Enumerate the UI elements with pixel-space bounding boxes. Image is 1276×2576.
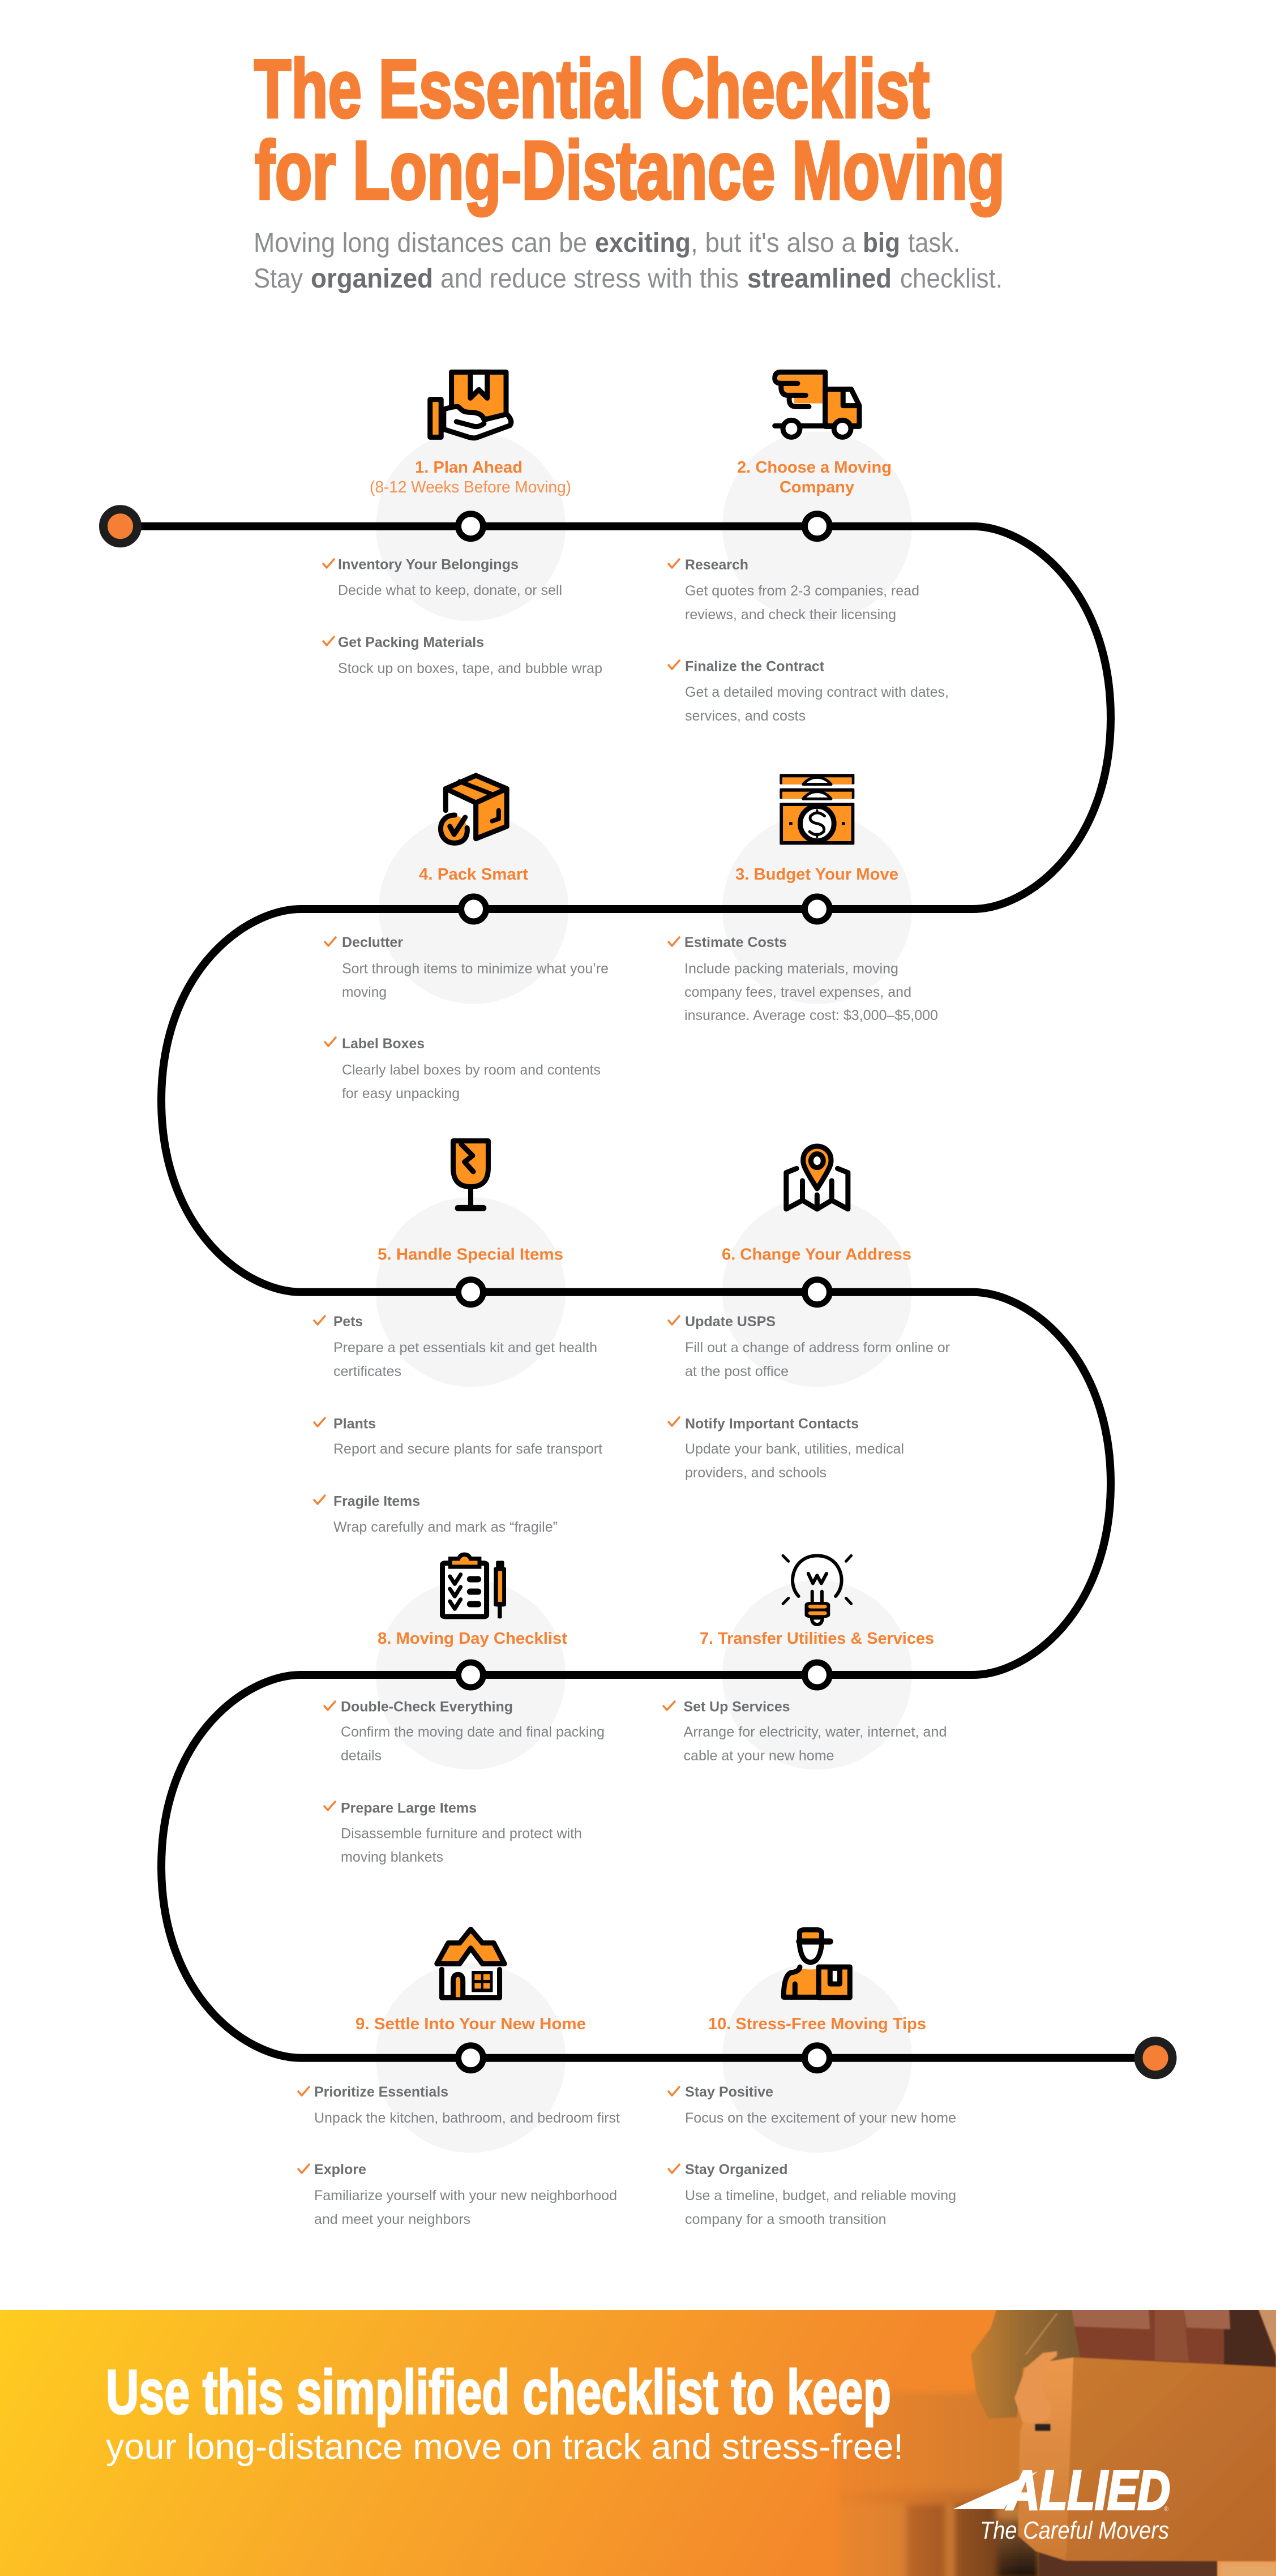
checklist item: double-check: Double-Check Everything xyxy=(341,1699,513,1715)
icon: moving truck xyxy=(775,372,859,437)
title: The Essential Checklist xyxy=(254,42,930,135)
heading xyxy=(370,458,571,496)
title: for Long-Distance Moving xyxy=(255,124,1005,216)
checklist item: large items: moving blankets xyxy=(341,1849,443,1865)
panel: step 10 stress-free moving tips xyxy=(669,1930,956,2227)
heading: 6. Change Your Address xyxy=(722,1246,911,1264)
checklist item: notify contacts: Update your bank, utilities, medical xyxy=(685,1441,904,1457)
checklist item: finalize contract: Finalize the Contract xyxy=(685,659,825,675)
intro text: streamlined xyxy=(747,264,892,294)
checklist item: set up services: Set Up Services xyxy=(684,1699,790,1715)
panel: step 1 plan ahead xyxy=(323,372,602,676)
checklist item: research xyxy=(669,557,919,623)
panel: step 4 pack smart xyxy=(325,775,609,1101)
checklist item: packing materials: Get Packing Materials xyxy=(338,635,484,650)
checklist item: label boxes: Clearly label boxes by room and contents xyxy=(342,1062,601,1078)
checklist item: fragile items xyxy=(314,1493,558,1535)
checklist item: packing materials: Stock up on boxes, tape, and bubble wrap xyxy=(338,661,602,676)
checklist item: estimate costs: company fees, travel expenses, and xyxy=(684,984,911,1000)
checklist item: double-check xyxy=(324,1699,605,1764)
icon: mover with box xyxy=(783,1930,850,1998)
checklist item: explore: and meet your neighbors xyxy=(314,2211,470,2227)
heading: Company xyxy=(780,478,854,496)
checklist item: label boxes xyxy=(325,1036,601,1101)
checklist item: estimate costs: insurance. Average cost: $3,000–$5,000 xyxy=(684,1008,938,1023)
checklist item: double-check: details xyxy=(341,1748,382,1764)
checklist item: research: reviews, and check their licensing xyxy=(685,607,896,623)
checklist item: set up services: Arrange for electricity, water, internet, and xyxy=(684,1724,947,1740)
logo: Allied: ® xyxy=(1164,2506,1168,2513)
heading xyxy=(737,458,892,496)
checklist item: declutter xyxy=(325,935,609,1000)
intro text: exciting xyxy=(595,228,691,258)
heading: 2. Choose a Moving xyxy=(737,458,892,477)
panel: step 8 moving day checklist xyxy=(324,1553,605,1865)
checklist item: pets: Pets xyxy=(333,1314,363,1330)
checklist item: label boxes: Label Boxes xyxy=(342,1036,425,1052)
title xyxy=(254,42,1005,216)
panel: step 5 handle special items xyxy=(314,1141,602,1535)
logo: Allied: ALLIED xyxy=(1006,2459,1170,2521)
heading: 1. Plan Ahead xyxy=(415,458,523,477)
icon: box in hand xyxy=(430,372,511,438)
panel: step 9 settle into your new home xyxy=(298,1929,620,2227)
end marker xyxy=(1138,2041,1172,2075)
heading: 3. Budget Your Move xyxy=(735,865,898,884)
heading: 7. Transfer Utilities & Services xyxy=(700,1630,934,1648)
timeline track xyxy=(103,509,1172,2075)
intro text: task. xyxy=(908,228,960,258)
intro text: organized xyxy=(311,264,433,294)
logo: Allied xyxy=(953,2470,1170,2539)
checklist item: stay organized: Use a timeline, budget, and reliable moving xyxy=(685,2188,956,2204)
checklist item: finalize contract: Get a detailed moving contract with dates, xyxy=(685,684,949,700)
checklist item: set up services: cable at your new home xyxy=(684,1748,834,1764)
icon: map pin xyxy=(786,1146,848,1209)
checklist item: pets xyxy=(314,1314,597,1379)
checklist item: pets: Prepare a pet essentials kit and get health xyxy=(333,1340,597,1356)
heading: 9. Settle Into Your New Home xyxy=(356,2015,586,2033)
checklist item: large items: Prepare Large Items xyxy=(341,1801,477,1816)
checklist item: packing materials xyxy=(323,635,602,676)
panel: step 3 budget your move xyxy=(669,774,938,1023)
checklist item: stay organized xyxy=(669,2162,956,2227)
checklist item: explore: Familiarize yourself with your new neighborhood xyxy=(314,2188,617,2204)
checklist item: inventory: Decide what to keep, donate, or sell xyxy=(338,582,562,598)
intro text: Stay xyxy=(254,264,303,294)
checklist item: update usps xyxy=(669,1314,950,1379)
checklist item: declutter: Declutter xyxy=(342,935,403,950)
checklist item: research: Get quotes from 2-3 companies, read xyxy=(685,583,919,599)
heading: 8. Moving Day Checklist xyxy=(378,1630,567,1648)
intro text: big xyxy=(863,228,900,258)
checklist item: notify contacts: Notify Important Contacts xyxy=(685,1416,859,1432)
checklist item: stay organized: Stay Organized xyxy=(685,2162,788,2178)
checklist item: fragile items: Wrap carefully and mark as “fragile” xyxy=(333,1519,558,1535)
heading: 5. Handle Special Items xyxy=(378,1246,563,1264)
checklist item: finalize contract xyxy=(669,659,949,724)
icon: house xyxy=(437,1929,504,1998)
intro text: Moving long distances can be xyxy=(254,228,587,258)
checklist item: update usps: Update USPS xyxy=(685,1314,776,1330)
checklist item: prioritize essentials: Unpack the kitchen, bathroom, and bedroom first xyxy=(314,2110,620,2126)
checklist item: notify contacts: providers, and schools xyxy=(685,1465,827,1481)
banner subline: your long-distance move on track and stress-free! xyxy=(106,2427,904,2467)
icon: money stack xyxy=(780,774,854,845)
panel: step 7 transfer utilities xyxy=(663,1555,947,1764)
checklist item: update usps: Fill out a change of address form online or xyxy=(685,1340,950,1356)
checklist item: pets: certificates xyxy=(333,1364,401,1379)
icon: clipboard and pen xyxy=(443,1553,506,1618)
checklist item: declutter: Sort through items to minimize what you’re xyxy=(342,961,609,977)
checklist item: prioritize essentials xyxy=(298,2084,620,2126)
panel: footer banner xyxy=(0,2307,1276,2576)
icon: fragile glass xyxy=(453,1141,488,1208)
checklist item: prioritize essentials: Prioritize Essentials xyxy=(314,2084,448,2100)
checklist item: estimate costs xyxy=(669,935,938,1023)
checklist item: inventory: Inventory Your Belongings xyxy=(338,557,519,573)
checklist item: label boxes: for easy unpacking xyxy=(342,1086,460,1101)
checklist item: inventory xyxy=(323,557,562,598)
intro text: and reduce stress with this xyxy=(440,264,739,294)
checklist item: stay positive xyxy=(669,2084,956,2126)
intro text xyxy=(254,228,1003,294)
icon: box with check xyxy=(440,775,507,843)
checklist item: explore: Explore xyxy=(314,2162,366,2178)
checklist item: plants xyxy=(314,1416,602,1457)
checklist item: explore xyxy=(298,2162,617,2227)
checklist item: large items: Disassemble furniture and protect with xyxy=(341,1826,582,1842)
checklist item: finalize contract: services, and costs xyxy=(685,708,806,724)
heading: 4. Pack Smart xyxy=(419,865,528,884)
checklist item: plants: Report and secure plants for safe transport xyxy=(333,1441,602,1457)
heading: (8-12 Weeks Before Moving) xyxy=(370,478,571,496)
heading: 10. Stress-Free Moving Tips xyxy=(708,2015,926,2033)
checklist item: declutter: moving xyxy=(342,984,387,1000)
checklist item: plants: Plants xyxy=(333,1416,376,1432)
checklist item: set up services xyxy=(663,1699,947,1764)
intro text: , but it's also a xyxy=(691,228,856,258)
photo: mover carrying a box xyxy=(838,2307,1276,2576)
checklist item: estimate costs: Estimate Costs xyxy=(684,935,787,950)
start marker xyxy=(103,509,137,543)
checklist item: notify contacts xyxy=(669,1416,904,1481)
intro text: checklist. xyxy=(900,264,1003,294)
panel: step 2 choose a moving company xyxy=(669,372,949,724)
checklist item: double-check: Confirm the moving date and final packing xyxy=(341,1724,605,1740)
panel: step 6 change your address xyxy=(669,1146,950,1481)
checklist item: research: Research xyxy=(685,557,748,573)
logo: Allied: The Careful Movers xyxy=(980,2517,1169,2544)
checklist item: stay organized: company for a smooth transition xyxy=(685,2211,887,2227)
icon: light bulb xyxy=(783,1555,851,1625)
checklist item: large items xyxy=(324,1801,582,1865)
checklist item: fragile items: Fragile Items xyxy=(333,1493,420,1509)
checklist item: stay positive: Stay Positive xyxy=(685,2084,773,2100)
banner headline: Use this simplified checklist to keep xyxy=(106,2358,891,2427)
checklist item: estimate costs: Include packing materials, moving xyxy=(684,961,898,977)
checklist item: update usps: at the post office xyxy=(685,1364,789,1379)
checklist item: stay positive: Focus on the excitement of your new home xyxy=(685,2110,956,2126)
